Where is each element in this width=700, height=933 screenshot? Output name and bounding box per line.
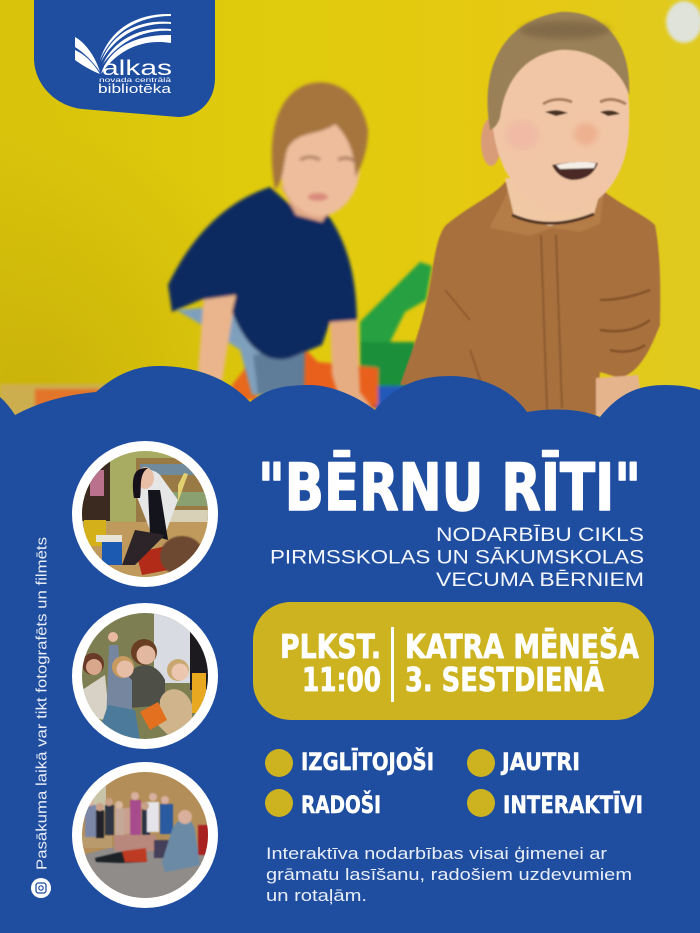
blue scalloped panel: [0, 366, 700, 933]
child right: [400, 12, 660, 416]
description: un rotaļām.: [266, 886, 367, 905]
icon: camera: [31, 878, 51, 898]
logo panel: Valkas novada centrālā bibliotēka: novada centrālā: [99, 77, 172, 84]
description: Interaktīva nodarbības visai ģimenei ar: [266, 844, 607, 863]
description: grāmatu lasīšanu, radošiem uzdevumiem: [266, 865, 632, 884]
description: [266, 844, 632, 905]
logo panel: Valkas novada centrālā bibliotēka: [34, 0, 215, 117]
photo circle: reader with a book: [72, 441, 218, 587]
subtitle: NODARBĪBU CIKLS: [436, 525, 644, 546]
side note: photo and film notice: Pasākuma laikā var tikt fotografēts un filmēts: [34, 537, 50, 870]
wall sticker: [666, 1, 700, 43]
logo icon: open book: [75, 14, 171, 74]
play blocks: [232, 262, 432, 416]
time and date pill: 3. SESTDIENĀ: [405, 660, 604, 699]
side note: photo and film notice: [31, 537, 51, 898]
time and date pill: PLKST.: [280, 627, 381, 666]
feature list: [265, 746, 643, 819]
feature list: INTERAKTĪVI: [503, 790, 643, 819]
child left: [168, 82, 374, 410]
photo circle: children raising hands: [72, 603, 218, 749]
feature list: RADOŠI: [301, 789, 381, 819]
time and date pill: [253, 602, 654, 720]
time and date pill: 11:00: [302, 660, 381, 699]
subtitle: PIRMSSKOLAS UN SĀKUMSKOLAS: [270, 548, 644, 568]
photo circle: group of children on a carpet: [72, 762, 218, 908]
feature list: IZGLĪTOJOŠI: [301, 746, 434, 776]
time and date pill: KATRA MĒNEŠA: [405, 626, 639, 666]
logo wordmark: alkas: [102, 57, 172, 80]
subtitle: [270, 525, 644, 591]
logo panel: Valkas novada centrālā bibliotēka: bibliotēka: [98, 82, 171, 96]
subtitle: VECUMA BĒRNIEM: [436, 570, 644, 591]
hero photo: two laughing children against a yellow wall: [0, 0, 700, 430]
feature list: JAUTRI: [500, 748, 580, 776]
